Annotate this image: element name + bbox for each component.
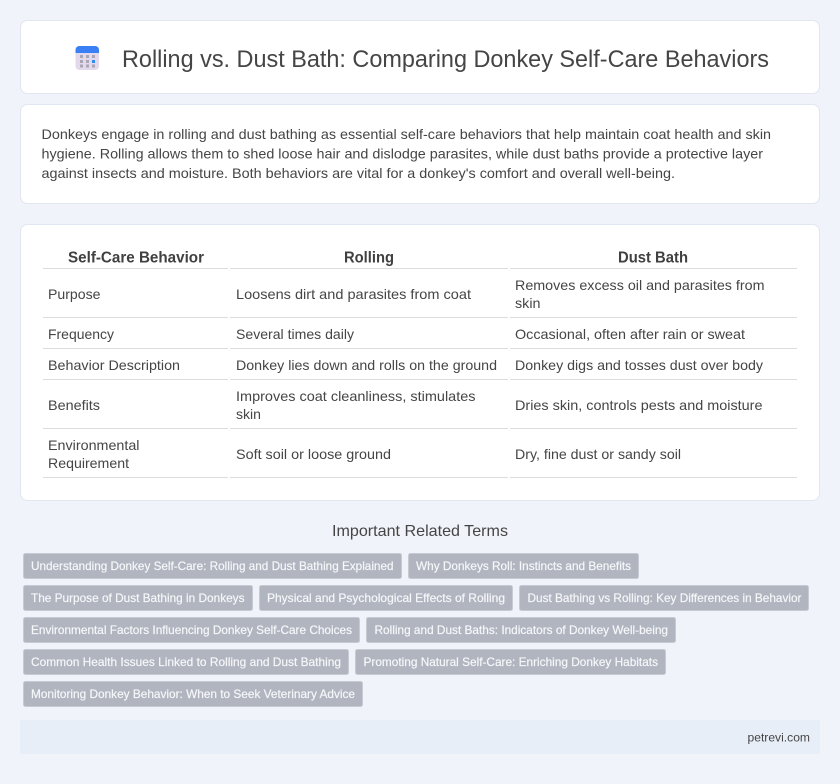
tag (408, 554, 638, 578)
table row: purpose: skin (515, 295, 540, 311)
table row: benefits: Dries skin, controls pests and moisture (515, 397, 763, 413)
table row: frequency: Frequency (48, 326, 114, 342)
text block: introduction paragraph (42, 126, 771, 181)
table row: benefits (48, 388, 763, 422)
table row: behavior description: Behavior Description (48, 357, 180, 373)
panel: introduction (20, 104, 820, 204)
text block: introduction paragraph: hygiene. Rolling allows them to shed loose hair and dislodge parasites, while dust baths provide a protective layer (42, 146, 763, 162)
text block: introduction paragraph: Donkeys engage in rolling and dust bathing as essential self-care behaviors that help maintain coat health and skin (42, 126, 771, 142)
table row: environmental requirement: Soft soil or loose ground (236, 446, 391, 462)
tag (24, 618, 360, 642)
tag: Rolling and Dust Baths: Indicators of Donkey Well-being (374, 623, 668, 637)
table row: purpose (48, 277, 764, 311)
table row: environmental requirement: Requirement (48, 455, 129, 471)
table header (68, 250, 688, 266)
table row: environmental requirement: Environmental (48, 437, 140, 453)
tag (356, 650, 666, 674)
table row: purpose: Purpose (48, 286, 101, 302)
tag: Environmental Factors Influencing Donkey Self-Care Choices (31, 623, 352, 637)
table header: Rolling (344, 250, 394, 266)
tag: Physical and Psychological Effects of Rolling (267, 591, 505, 605)
heading: related terms: Important Related Terms (332, 523, 508, 540)
panel: title card (20, 20, 820, 94)
footer source text: petrevi.com (748, 730, 810, 744)
tag: Why Donkeys Roll: Instincts and Benefits (416, 559, 631, 573)
table row: behavior description: Donkey lies down and rolls on the ground (236, 357, 497, 373)
tag (24, 682, 362, 706)
tag: Monitoring Donkey Behavior: When to Seek Veterinary Advice (31, 687, 355, 701)
icon: calendar (76, 46, 99, 70)
panel: comparison table (20, 224, 820, 500)
table row: purpose: Removes excess oil and parasites from (515, 277, 764, 293)
table row: benefits: skin (236, 406, 261, 422)
table header: Self-Care Behavior (68, 250, 204, 266)
tag: The Purpose of Dust Bathing in Donkeys (31, 591, 244, 605)
table row: frequency: Several times daily (236, 326, 354, 342)
tag (366, 618, 676, 642)
table row: purpose: Loosens dirt and parasites from coat (236, 286, 471, 302)
tag (24, 586, 252, 610)
table row: behavior description (48, 357, 763, 373)
tag (520, 586, 808, 610)
tag: Common Health Issues Linked to Rolling and Dust Bathing (31, 655, 341, 669)
tag (24, 554, 402, 578)
tag: Dust Bathing vs Rolling: Key Differences in Behavior (528, 591, 802, 605)
table row: behavior description: Donkey digs and tosses dust over body (515, 357, 763, 373)
related term tags (24, 554, 808, 706)
tag (24, 650, 348, 674)
table row: environmental requirement (48, 437, 681, 471)
table row: frequency (48, 326, 745, 342)
table row: benefits: Improves coat cleanliness, stimulates (236, 388, 476, 404)
footer (20, 720, 820, 754)
table row: environmental requirement: Dry, fine dust or sandy soil (515, 446, 681, 462)
table row: frequency: Occasional, often after rain or sweat (515, 326, 745, 342)
tag: Promoting Natural Self-Care: Enriching Donkey Habitats (364, 655, 658, 669)
tag: Understanding Donkey Self-Care: Rolling and Dust Bathing Explained (31, 559, 394, 573)
title: Rolling vs. Dust Bath: Comparing Donkey Self-Care Behaviors (122, 46, 769, 73)
table row: benefits: Benefits (48, 397, 100, 413)
tag (260, 586, 512, 610)
table header: Dust Bath (618, 250, 688, 266)
text block: introduction paragraph: against insects and moisture. Both behaviors are vital for a donkey's comfort and overall well-being. (42, 165, 675, 181)
